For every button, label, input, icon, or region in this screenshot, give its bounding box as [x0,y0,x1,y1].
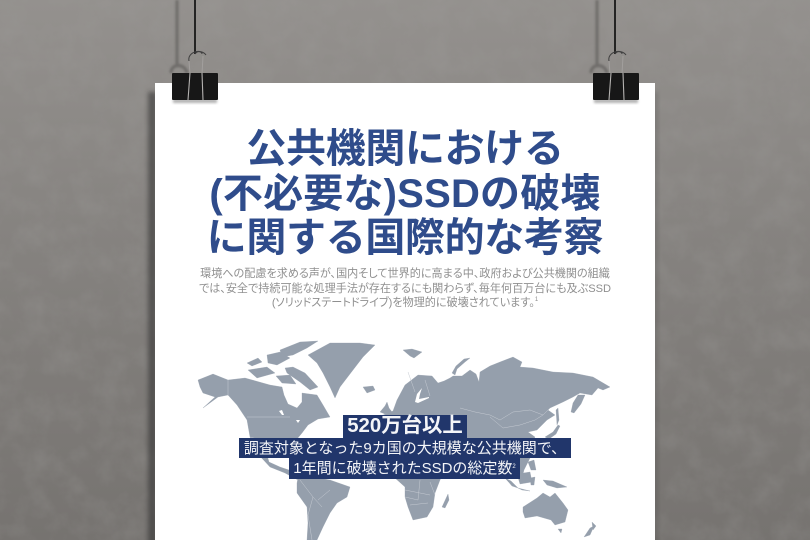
map: inland seas [279,388,429,423]
map: Eurasia [376,357,610,478]
left hanging wire and shadow [169,0,206,74]
map: Africa [368,435,445,520]
callout description line 2: 1年間に破壊されたSSDの総定数2 [293,460,516,477]
map: Australia [523,493,568,525]
callout description line 1: 調査対象となった9カ国の大規模な公共機関で、 [244,440,566,457]
map: Kamchatka [571,395,585,413]
intro text: 環境への配慮を求める声が、国内そして世界的に高まる中、政府および公共機関の組織 [200,268,610,280]
intro text: (ソリッドステートドライブ)を物理的に破壊されています。1 [272,297,538,309]
map: Svalbard [403,349,422,358]
map: South America [297,477,350,540]
map: North America [198,374,330,480]
map: Tasmania [558,529,562,533]
map: Greenland [308,343,375,398]
intro text [199,267,611,309]
map: Great Britain [380,402,392,414]
right binder clip [592,73,640,104]
map: Novaya Zemlya [452,358,470,375]
map: Madagascar [442,494,449,508]
intro text: では、安全で持続可能な処理手法が存在するにも関わらず、毎年何百万台にも及ぶSSD [199,282,611,294]
map: Indonesia and Philippines [505,460,567,491]
paper poster [155,83,655,540]
map: Arctic archipelago [247,341,318,390]
map: New Zealand [584,522,596,537]
title: に関する国際的な考察 [207,216,603,260]
map: Japan [545,425,560,439]
title: 公共機関における [246,127,564,171]
map: Iceland [363,386,375,393]
map: Sakhalin [556,408,559,425]
left binder clip [172,73,218,104]
title: (不必要な)SSDの破壊 [209,172,601,216]
right hanging wire and shadow [589,0,626,74]
callout figure: 520万台以上 [347,415,463,437]
title [207,127,603,260]
callout: total SSDs destroyed [239,414,571,479]
world map [198,340,610,540]
